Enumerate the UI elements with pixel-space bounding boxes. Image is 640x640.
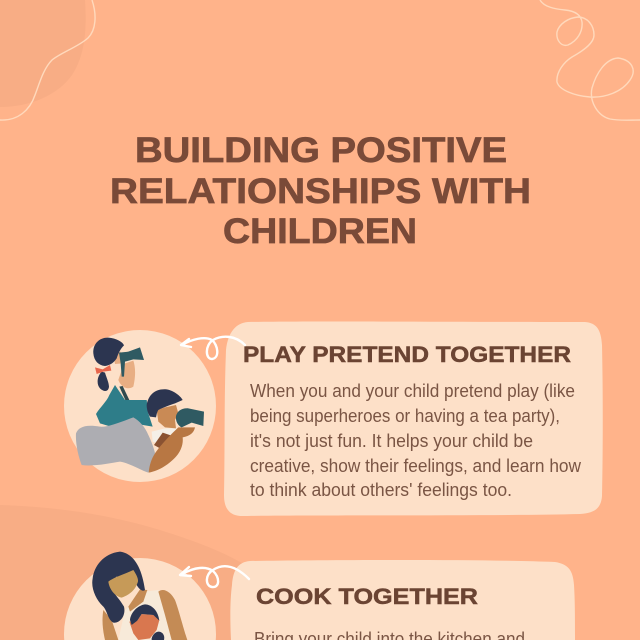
man face xyxy=(157,405,178,428)
man body xyxy=(76,417,155,473)
child ponytail xyxy=(152,632,164,640)
title xyxy=(110,131,531,251)
illustration: parent and child with cameras xyxy=(64,330,216,482)
title: RELATIONSHIPS WITH xyxy=(110,172,531,211)
card background xyxy=(224,322,603,516)
title: CHILDREN xyxy=(223,212,417,251)
card background xyxy=(230,560,575,640)
squiggle: top-left line xyxy=(0,0,95,120)
circle backdrop xyxy=(64,330,216,482)
child ponytail xyxy=(98,372,109,391)
heading: COOK TOGETHER xyxy=(256,584,478,609)
body text: to think about others' feelings too. xyxy=(250,480,512,500)
arrow: cook together xyxy=(180,566,249,587)
panel: cook together xyxy=(230,560,575,640)
arrow: play pretend xyxy=(181,337,245,359)
man shirt collar xyxy=(152,428,177,444)
child face xyxy=(113,352,123,364)
child face xyxy=(129,614,159,640)
body text: being superheroes or having a tea party), xyxy=(250,406,560,426)
circle backdrop xyxy=(64,558,216,640)
man hair xyxy=(147,389,183,417)
heading: PLAY PRETEND TOGETHER xyxy=(243,342,571,367)
illustration: mother and child xyxy=(64,552,216,640)
mother face xyxy=(108,570,138,598)
body text: it's not just fun. It helps your child be xyxy=(250,431,533,451)
squiggle: top-right loops xyxy=(540,0,640,120)
man camera xyxy=(176,408,204,427)
child hair xyxy=(93,338,124,366)
mother hair xyxy=(92,552,145,623)
body text: creative, show their feelings, and learn how xyxy=(250,456,582,476)
mother arms xyxy=(158,590,187,640)
body text xyxy=(250,381,582,500)
child hair bow xyxy=(95,365,111,374)
panel: play pretend together xyxy=(224,322,603,516)
mother neck xyxy=(128,589,147,612)
man forearm xyxy=(149,427,195,473)
child hair xyxy=(130,604,159,625)
mother dress xyxy=(118,590,172,640)
child arm xyxy=(118,361,135,388)
child dress xyxy=(96,385,153,428)
blob: lower-left background xyxy=(0,505,250,640)
body text: When you and your child pretend play (like xyxy=(250,381,575,401)
title: BUILDING POSITIVE xyxy=(135,131,507,170)
blob: top-left corner xyxy=(0,0,86,107)
child camera xyxy=(119,347,144,377)
